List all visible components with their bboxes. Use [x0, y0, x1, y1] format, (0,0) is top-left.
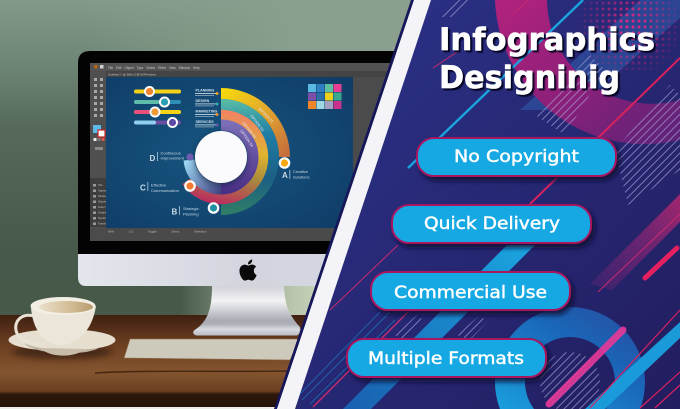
arc labels: OPTION 04 — [239, 129, 254, 149]
button: Quick Delivery — [392, 205, 591, 243]
blue ring — [495, 307, 645, 409]
marker C — [184, 180, 196, 192]
button: Multiple Formats: Multiple Formats — [368, 349, 524, 369]
panel background — [290, 0, 680, 409]
layers panel: Gradient — [98, 210, 109, 214]
label D: Continuous — [160, 150, 181, 156]
hatch circle — [540, 352, 600, 409]
pink thin lines — [313, 0, 528, 407]
label A: Solutions — [293, 174, 309, 180]
coffee cup and saucer — [8, 297, 116, 359]
screen: illustrator window — [90, 63, 390, 241]
arc labels: OPTION 01 — [257, 107, 274, 124]
panel: desk photo with monitor — [0, 0, 426, 409]
pink rod upper right — [645, 248, 677, 278]
button: Commercial Use — [371, 272, 570, 310]
lighter diagonal band behind top right — [520, 0, 680, 110]
panel: white diagonal divider — [277, 0, 431, 409]
keyboard — [124, 339, 300, 360]
status bar: 66% 1/1 Toggle Direct Selection — [108, 230, 207, 234]
option list labels: DESIGN — [196, 99, 210, 103]
panel: navy promo side — [290, 0, 680, 409]
title — [439, 22, 655, 96]
arc labels: OPTION 03 — [241, 121, 257, 139]
lower left blue lines — [298, 312, 395, 404]
pink rod over ring — [549, 330, 623, 404]
label B: Strategic — [183, 206, 199, 211]
label A: A — [282, 171, 288, 180]
option list labels: MARKETING — [196, 110, 217, 114]
pink fading stripe — [590, 194, 680, 290]
option list labels — [195, 88, 218, 127]
background: light wall glow — [188, 286, 316, 315]
monitor stand base — [193, 325, 300, 336]
wood grain streak — [95, 371, 290, 373]
button: No Copyright — [417, 138, 616, 176]
monitor stand — [193, 286, 300, 336]
thick blue diagonal band — [343, 245, 535, 409]
label B — [172, 206, 199, 216]
marker A — [279, 157, 290, 169]
hatch patches — [395, 0, 680, 342]
document tab: Untitled-1* @ 66% (CMYK/Preview) — [108, 72, 156, 76]
table bottom edge — [0, 407, 274, 409]
option list labels: PLANNING — [196, 88, 214, 92]
halftone dots — [570, 0, 680, 70]
option list labels: SERVICES — [196, 120, 214, 124]
label C: C — [140, 184, 146, 192]
layers panel: Glyphs — [98, 200, 107, 204]
arc labels: OPTION 02 — [249, 114, 265, 132]
layers panel: Symbols — [98, 216, 109, 220]
wooden table — [0, 315, 308, 407]
design canvas — [106, 77, 353, 228]
colour swatch grid — [308, 84, 342, 109]
app menu bar: File Edit Object Type Select Effect View Window Help — [108, 66, 200, 70]
blue line — [408, 0, 583, 168]
app menu bar — [94, 65, 200, 70]
layers panel: Color Guide — [98, 205, 113, 209]
layers panel: Transform — [98, 222, 111, 226]
title: Designinig — [439, 60, 620, 96]
marker D — [186, 153, 194, 161]
pink long line — [530, 58, 680, 204]
pink lines lower right — [590, 310, 680, 408]
label A: Creative — [293, 169, 309, 174]
label B: Planning — [183, 212, 199, 216]
status bar — [108, 230, 206, 233]
button: Commercial Use: Commercial Use — [394, 283, 547, 303]
layers panel: Info — [98, 183, 103, 187]
tool bar — [93, 78, 106, 150]
navy edge of divider — [274, 0, 414, 409]
radial semicircle chart — [187, 94, 284, 210]
label D — [150, 152, 184, 161]
label D: Improvement — [160, 156, 185, 160]
label B: B — [172, 208, 178, 216]
background: upper wall tone — [164, 4, 410, 51]
label D: D — [150, 154, 156, 163]
title: Infographics — [439, 22, 655, 58]
button: No Copyright: No Copyright — [454, 147, 579, 167]
label C — [140, 182, 179, 193]
label A — [282, 170, 310, 179]
document tab — [108, 74, 156, 76]
icon: apple logo — [239, 260, 257, 281]
button: Quick Delivery: Quick Delivery — [424, 214, 560, 234]
monitor black bezel — [78, 51, 420, 254]
marker B — [208, 202, 219, 214]
layers panel: Appearance — [98, 188, 114, 192]
label C: Effective — [151, 182, 167, 188]
lower right blue bar — [585, 322, 680, 409]
center white disc — [195, 131, 247, 183]
label C: Communication — [151, 188, 179, 193]
layers panel: Stroke — [98, 194, 107, 198]
magenta ring — [495, 0, 680, 144]
slider bars — [134, 86, 181, 128]
button: Multiple Formats — [347, 339, 546, 377]
pink thin stripe — [598, 214, 680, 292]
monitor chin — [78, 254, 329, 286]
arc labels — [240, 108, 274, 147]
background: green wall — [0, 0, 420, 320]
layers panel — [90, 178, 106, 227]
